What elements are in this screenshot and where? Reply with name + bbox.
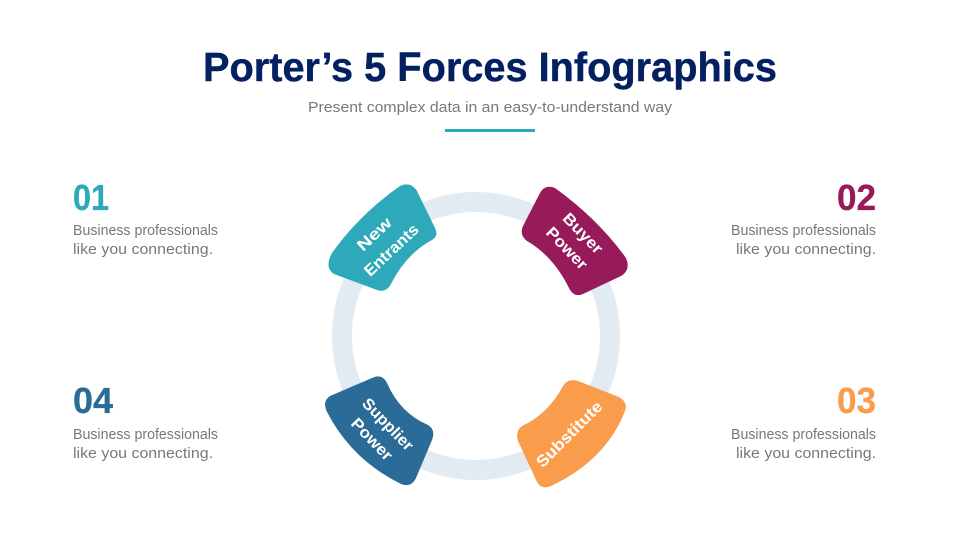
block 04: like you connecting. — [73, 446, 213, 462]
block 02: Business professionals — [731, 223, 876, 239]
block 02 — [731, 177, 876, 258]
segment: New Entrants: New — [354, 214, 396, 255]
block 01: like you connecting. — [73, 242, 213, 258]
segment: Buyer Power — [522, 187, 628, 295]
block 01 — [73, 177, 218, 258]
block 03 — [731, 380, 876, 462]
title: Porter’s 5 Forces Infographics — [203, 44, 777, 90]
ring — [342, 202, 610, 470]
block 01: Business professionals — [73, 223, 218, 239]
block 04: 04 — [73, 380, 113, 421]
segment: Substitute — [517, 380, 626, 487]
segment: New Entrants — [328, 184, 436, 291]
block 03: 03 — [837, 380, 876, 421]
title underline — [445, 129, 535, 132]
block 03: like you connecting. — [736, 446, 876, 462]
segment: Buyer Power: Power — [542, 224, 590, 273]
segment: Buyer Power: Buyer — [559, 210, 606, 258]
block 04: Business professionals — [73, 427, 218, 443]
block 02: like you connecting. — [736, 242, 876, 258]
segment: Supplier Power: Power — [347, 415, 395, 464]
block 01: 01 — [73, 177, 109, 218]
segment: Supplier Power — [325, 376, 433, 485]
subtitle: Present complex data in an easy-to-understand way — [308, 99, 673, 116]
segment: Substitute: Substitute — [533, 398, 606, 471]
block 03: Business professionals — [731, 427, 876, 443]
segment: New Entrants: Entrants — [361, 221, 423, 280]
block 04 — [73, 380, 218, 462]
segment: Supplier Power: Supplier — [358, 395, 416, 455]
block 02: 02 — [837, 177, 876, 218]
